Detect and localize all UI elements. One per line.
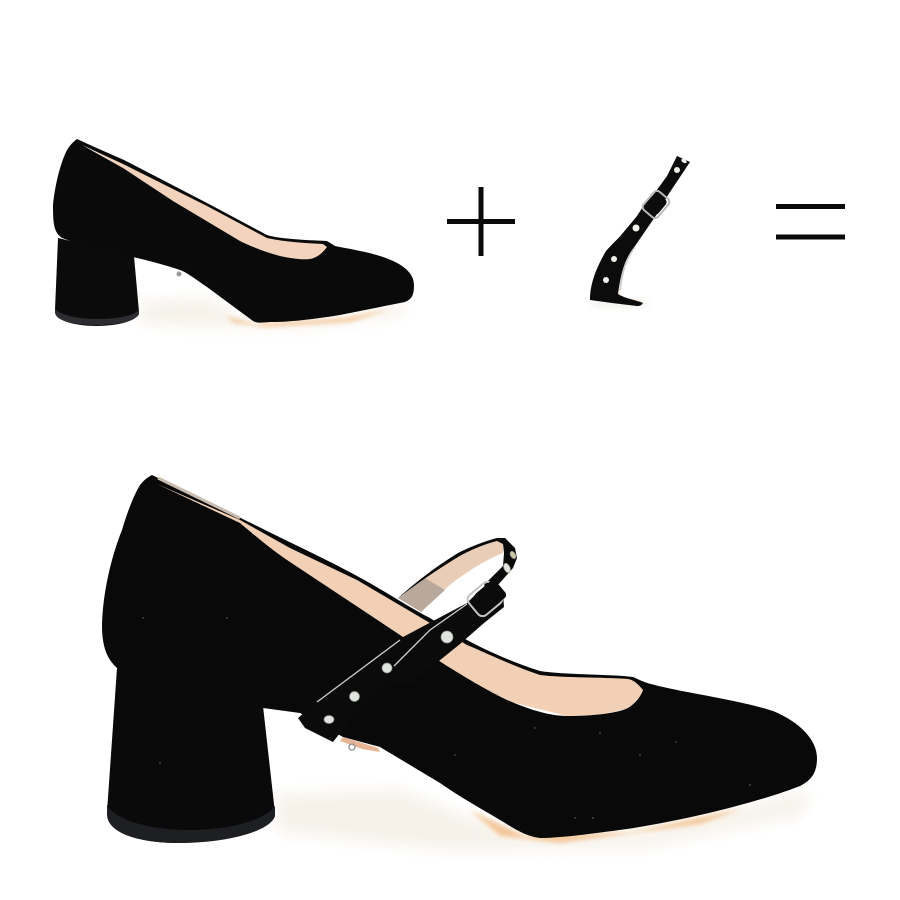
large shoe heel sole rim bbox=[107, 805, 275, 843]
small shoe heel bbox=[55, 238, 139, 326]
large shoe heel bbox=[107, 668, 275, 843]
strap insole bbox=[612, 283, 642, 306]
strap band bbox=[298, 592, 504, 742]
large shoe lining bbox=[152, 475, 645, 716]
small shoe heel sole rim bbox=[55, 309, 139, 325]
back strap black edge bbox=[398, 538, 517, 598]
inner top edge line of shoe bbox=[158, 478, 240, 518]
suede specks bbox=[142, 617, 751, 819]
strap buckle bbox=[641, 189, 671, 220]
back strap lining bbox=[398, 541, 503, 612]
silver charm bbox=[349, 744, 355, 750]
front strap bbox=[298, 550, 517, 742]
strap holes bbox=[603, 158, 687, 283]
buckle ring bbox=[465, 579, 505, 619]
large shoe upper bbox=[102, 475, 817, 838]
small shoe upper bbox=[53, 139, 414, 323]
large black shoe with strap bbox=[102, 475, 817, 850]
beige tab under strap bbox=[340, 737, 380, 752]
small shoe silver charm bbox=[176, 272, 182, 276]
strap shadow bbox=[590, 300, 650, 308]
strap silver edge bbox=[317, 604, 467, 702]
strap studs bbox=[324, 550, 517, 724]
small black pump shoe bbox=[53, 139, 414, 328]
detachable strap bbox=[590, 156, 690, 308]
equals sign bbox=[776, 206, 845, 237]
floor shadow under large shoe bbox=[275, 790, 810, 850]
small shoe lining bbox=[78, 141, 328, 259]
back strap grey inner patch bbox=[398, 578, 445, 612]
plus sign bbox=[447, 187, 515, 256]
strap band bbox=[590, 156, 690, 306]
buckle leather cover bbox=[473, 579, 508, 613]
floor shadow under small shoe bbox=[140, 298, 410, 328]
strap silver edge bbox=[620, 247, 635, 290]
